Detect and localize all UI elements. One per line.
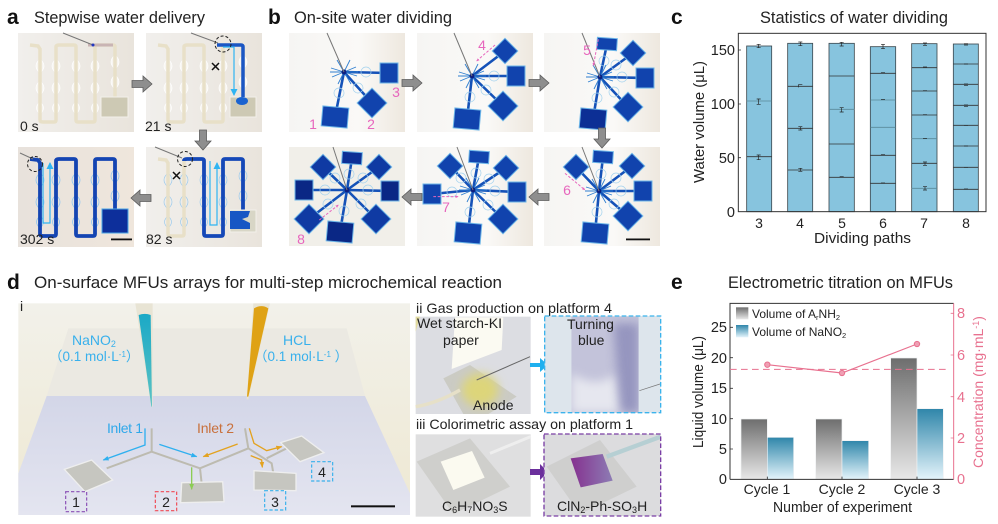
- NaNO2 label: NaNO: [72, 332, 111, 348]
- dashed platform boxes: [66, 462, 333, 512]
- right axis labels e: 2: [957, 431, 965, 447]
- photo ii left: [416, 317, 531, 414]
- photo b 4 paths: [417, 33, 533, 132]
- panel: e electrometric titration chart: [671, 271, 986, 516]
- photo b 5 paths: [544, 33, 660, 132]
- NaNO2 label: 2: [111, 339, 116, 349]
- x axis title e: Number of experiment: [773, 500, 912, 516]
- legend text: [752, 307, 846, 340]
- pink path numbers: 2: [367, 116, 375, 132]
- heading c: Statistics of water dividing: [760, 9, 948, 27]
- y axis labels c: 150: [711, 43, 735, 59]
- photo a 302 s: [18, 147, 134, 247]
- arrow b right 1: [402, 75, 422, 91]
- right axis title e: Concentration (mg·mL: [970, 329, 986, 468]
- arrow b right 2: [529, 75, 549, 91]
- right axis title e: -1: [971, 321, 981, 329]
- x axis title c: Dividing paths: [814, 230, 911, 247]
- scale bar d: [351, 505, 395, 507]
- x axis labels c: 4: [796, 215, 804, 231]
- panel letter a: a: [7, 6, 19, 29]
- channels and platforms: [64, 428, 324, 503]
- arrow a down: [195, 130, 211, 150]
- Inlet 1 label: Inlet 1: [107, 420, 143, 436]
- right axis labels e: [957, 306, 965, 488]
- label ClN2-Ph-SO3H: -Ph-SO: [585, 498, 632, 514]
- x axis labels c: [755, 215, 970, 231]
- photo b 7 paths: [417, 147, 533, 246]
- y axis labels c: [711, 43, 735, 221]
- label C6H7NO3S: NO: [472, 498, 493, 514]
- panel: b on-site water dividing: [268, 6, 660, 247]
- panel letter b: b: [268, 6, 281, 29]
- pink path numbers: 6: [563, 182, 571, 198]
- panel letter d: d: [7, 271, 20, 294]
- arrow purple: [530, 464, 548, 480]
- left axis labels e: [711, 320, 727, 488]
- pink path numbers: 7: [442, 199, 450, 215]
- panel: d on-surface MFU arrays: [7, 271, 661, 517]
- HCL concentration: ）: [331, 349, 348, 364]
- left axis title e: Liquid volume (μL): [691, 336, 707, 448]
- label ClN2-Ph-SO3H: 3: [632, 505, 637, 515]
- legend text: r: [816, 313, 819, 322]
- label C6H7NO3S: 3: [493, 505, 498, 515]
- photo a 82 s: [146, 147, 262, 247]
- label anode: Anode: [473, 397, 514, 413]
- heading ii: ii Gas production on platform 4: [416, 300, 612, 316]
- time label 82 s: 82 s: [146, 231, 172, 247]
- legend text: Volume of NaNO: [752, 325, 842, 339]
- photo b 3 paths: [289, 33, 405, 132]
- left axis labels e: 0: [719, 472, 727, 488]
- x axis labels c: 7: [920, 215, 928, 231]
- arrow b left 1: [529, 189, 549, 205]
- pink path numbers: 3: [392, 84, 400, 100]
- x axis labels e: Cycle 1: [744, 481, 791, 497]
- label blue: blue: [578, 332, 605, 348]
- pink path numbers: 1: [309, 116, 317, 132]
- label C6H7NO3S: C: [442, 498, 452, 514]
- pipette yellow: [247, 303, 270, 399]
- photo ii right turning blue: [545, 316, 661, 413]
- time label 0 s: 0 s: [20, 118, 39, 134]
- y axis labels c: 100: [711, 97, 735, 113]
- platform numbers: 1: [72, 494, 80, 510]
- NaNO2 concentration: （0.1 mol·L: [49, 349, 119, 364]
- right axis title e: ): [970, 316, 986, 321]
- label C6H7NO3S: 6: [452, 505, 457, 515]
- NaNO2 concentration: ）: [126, 349, 139, 364]
- panel: c statistics chart: [671, 6, 986, 247]
- heading iii: iii Colorimetric assay on platform 1: [416, 416, 633, 432]
- x axis labels c: 3: [755, 215, 763, 231]
- pink path numbers: 8: [297, 231, 305, 247]
- legend text: Volume of A: [752, 307, 816, 321]
- flow arrows: [103, 428, 282, 489]
- pink path numbers: [297, 37, 591, 247]
- label turning: Turning: [567, 316, 614, 332]
- y axis labels c: 50: [719, 151, 735, 167]
- left axis labels e: 25: [711, 320, 727, 336]
- label C6H7NO3S: S: [498, 498, 508, 514]
- NaNO2 concentration: -1: [119, 350, 126, 359]
- heading b: On-site water dividing: [294, 9, 452, 27]
- bar and line chart: [730, 303, 954, 479]
- x axis labels c: 5: [838, 215, 846, 231]
- label C6H7NO3S: H: [457, 498, 467, 514]
- panel: a stepwise water delivery: [7, 6, 262, 247]
- label i: i: [20, 298, 23, 314]
- legend text: 2: [842, 331, 846, 340]
- y axis title c: Water volume (μL): [691, 61, 708, 183]
- x axis labels c: 6: [879, 215, 887, 231]
- platform numbers: [72, 464, 326, 510]
- arrow a right: [132, 76, 152, 92]
- pink dashed arrows: [319, 39, 598, 220]
- right axis labels e: 4: [957, 390, 965, 406]
- label C6H7NO3S: 7: [467, 505, 472, 515]
- photo a 0 s: [18, 33, 134, 132]
- left axis labels e: 10: [711, 412, 727, 428]
- pink path numbers: 5: [583, 42, 591, 58]
- label ClN2-Ph-SO3H: ClN: [557, 498, 580, 514]
- legend text: 2: [836, 313, 840, 322]
- photo b 8 paths: [289, 147, 405, 246]
- photo a 21 s: [146, 33, 262, 132]
- left axis labels e: 5: [719, 442, 727, 458]
- pipette teal: [135, 303, 153, 407]
- label paper: paper: [443, 332, 479, 348]
- platform numbers: 4: [318, 464, 326, 480]
- right axis labels e: 0: [957, 472, 965, 488]
- y axis labels c: 0: [727, 205, 735, 221]
- scale bar a: [111, 238, 132, 240]
- legend text: NH: [819, 307, 836, 321]
- arrow blue: [530, 358, 548, 372]
- left axis labels e: 15: [711, 381, 727, 397]
- arrow b left 2: [402, 189, 422, 205]
- arrow a left: [131, 190, 151, 206]
- photo b 6 paths: [544, 147, 660, 246]
- HCL label: HCL: [283, 332, 311, 348]
- photo i platform: [18, 303, 410, 515]
- x axis labels e: Cycle 3: [894, 481, 941, 497]
- photo iii right: [544, 434, 661, 516]
- stacked bar chart: [738, 33, 986, 212]
- HCL concentration: （0.1 mol·L: [254, 349, 324, 364]
- photo iii left: [416, 434, 531, 517]
- x axis labels c: 8: [962, 215, 970, 231]
- panel letter c: c: [671, 6, 683, 29]
- x axis labels e: Cycle 2: [819, 481, 866, 497]
- label ClN2-Ph-SO3H: H: [637, 498, 647, 514]
- heading a: Stepwise water delivery: [34, 9, 206, 27]
- right axis labels e: 8: [957, 306, 965, 322]
- arrow b down: [594, 128, 610, 148]
- label ClN2-Ph-SO3H: 2: [580, 505, 585, 515]
- heading d: On-surface MFUs arrays for multi-step microchemical reaction: [34, 274, 502, 292]
- platform numbers: 2: [162, 494, 170, 510]
- time label 21 s: 21 s: [145, 118, 171, 134]
- scale bar b: [626, 238, 650, 240]
- left axis labels e: 20: [711, 351, 727, 367]
- x axis labels e: [744, 481, 941, 497]
- heading e: Electrometric titration on MFUs: [728, 274, 953, 292]
- HCL concentration: -1: [324, 350, 331, 359]
- pink path numbers: 4: [478, 37, 486, 53]
- time label 302 s: 302 s: [20, 231, 54, 247]
- platform numbers: 3: [271, 494, 279, 510]
- label wet starch paper: Wet starch-KI: [417, 315, 502, 331]
- right axis labels e: 6: [957, 348, 965, 364]
- panel letter e: e: [671, 271, 683, 294]
- Inlet 2 label: Inlet 2: [197, 420, 234, 436]
